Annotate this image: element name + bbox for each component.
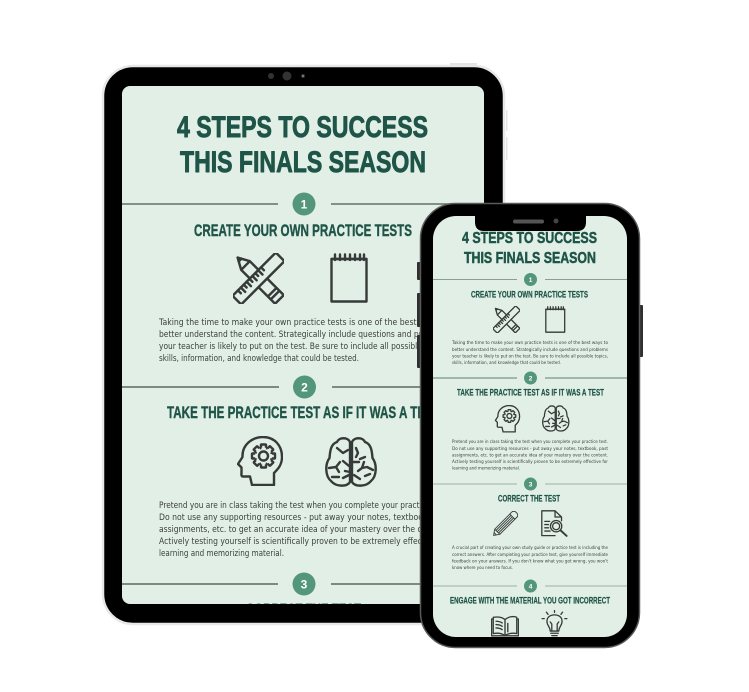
- step 4 heading: ENGAGE WITH THE MATERIAL YOU GOT INCORRECT: [450, 596, 610, 606]
- step 1 heading: CREATE YOUR OWN PRACTICE TESTS: [471, 290, 588, 300]
- step 3 text: correct answers. After completing your practice test, give yourself immediate: [452, 552, 608, 558]
- step 2 text: Do not use any supporting resources - put away your notes, textbook, past: [452, 446, 608, 452]
- step 3 text: know where you need to focus.: [452, 565, 513, 571]
- step 1 text: better understand the content. Strategically include questions and problems: [159, 330, 449, 340]
- step 3 heading: CORRECT THE TEST: [246, 601, 361, 619]
- step 1 text: better understand the content. Strategically include questions and problems: [452, 347, 609, 353]
- step 4 divider: [433, 580, 627, 592]
- step 2 text: Actively testing yourself is scientifically proven to be extremely effective for: [159, 537, 449, 547]
- step 2 text: [159, 501, 420, 558]
- step 2 text: assignments, etc. to get an accurate idea of your mastery over the content.: [452, 452, 608, 458]
- tablet hardware buttons: [450, 63, 508, 160]
- step 3 text: [452, 545, 608, 571]
- tablet camera: [268, 72, 305, 80]
- step 1 divider: 1: [301, 198, 308, 212]
- step 3 divider: [122, 572, 420, 596]
- step 2 divider: [433, 372, 627, 384]
- step 3 divider: 3: [301, 578, 308, 592]
- step 1 text: skills, information, and knowledge that could be tested.: [452, 360, 561, 366]
- step 2 text: assignments, etc. to get an accurate idea of your mastery over the content.: [159, 525, 449, 535]
- step 2 text: Pretend you are in class taking the test when you complete your practice test.: [159, 501, 449, 511]
- step 2 text: Actively testing yourself is scientifically proven to be extremely effective for: [452, 459, 608, 465]
- step 1 text: [451, 340, 609, 366]
- title: [462, 232, 597, 264]
- icon: pencil: [493, 511, 518, 536]
- icon: pencil and ruler: [233, 253, 284, 304]
- icon: light bulb: [542, 611, 567, 636]
- phone device: [417, 204, 643, 648]
- title: 4 STEPS TO SUCCESS: [462, 230, 597, 247]
- step 2 divider: 2: [301, 380, 308, 394]
- step 1 text: Taking the time to make your own practice tests is one of the best ways to: [158, 318, 449, 328]
- step 3 divider: 3: [529, 482, 533, 488]
- step 1 text: your teacher is likely to put on the test. Be sure to include all possible topics,: [452, 354, 608, 360]
- step 2 text: learning and memorizing material.: [159, 549, 284, 559]
- icon: open book: [492, 617, 518, 636]
- icon: notepad: [546, 307, 565, 332]
- step 2 heading: TAKE THE PRACTICE TEST AS IF IT WAS A TEST: [457, 388, 604, 398]
- step 1 text: your teacher is likely to put on the test. Be sure to include all possible topics,: [159, 342, 449, 352]
- step 2 text: [452, 439, 608, 472]
- step 4 divider: 4: [529, 584, 533, 590]
- step 2 text: Do not use any supporting resources - put away your notes, textbook, past: [159, 513, 450, 523]
- step 2 heading: TAKE THE PRACTICE TEST AS IF IT WAS A TEST: [167, 404, 440, 422]
- step 1 text: [158, 318, 420, 363]
- step 2 text: Pretend you are in class taking the test when you complete your practice test.: [452, 439, 608, 445]
- icon: notepad: [332, 254, 366, 302]
- title: THIS FINALS SEASON: [180, 146, 426, 179]
- phone body: [420, 204, 640, 648]
- step 1 divider: [122, 192, 484, 216]
- step 3 divider: [433, 478, 627, 490]
- step 2 text: learning and memorizing material.: [452, 466, 520, 472]
- phone hardware buttons: [417, 262, 643, 368]
- tablet screen: [122, 86, 484, 619]
- title: THIS FINALS SEASON: [464, 250, 596, 267]
- icon: brain: [543, 406, 569, 431]
- step 1 divider: 1: [529, 277, 533, 284]
- phone screen: [433, 216, 627, 637]
- step 1 text: Taking the time to make your own practice tests is one of the best ways to: [451, 340, 608, 346]
- step 2 divider: [122, 376, 420, 398]
- phone notch: [475, 214, 586, 231]
- step 1 text: skills, information, and knowledge that could be tested.: [159, 354, 359, 364]
- icon: pencil and ruler: [493, 306, 520, 333]
- step 3 text: feedback on your answers. If you don't know what you got wrong, you won't: [452, 558, 608, 564]
- step 1 divider: [433, 273, 627, 286]
- step 2 divider: 2: [529, 376, 533, 382]
- step 3 text: A crucial part of creating your own study guide or practice test is including the: [452, 545, 608, 551]
- step 3 heading: CORRECT THE TEST: [498, 494, 560, 504]
- icon: head with gear: [238, 437, 282, 485]
- icon: document with magnifier: [542, 511, 567, 536]
- title: 4 STEPS TO SUCCESS: [177, 111, 428, 144]
- icon: head with gear: [495, 406, 520, 432]
- tablet device: [103, 63, 508, 624]
- tablet body: [103, 66, 504, 624]
- title: [177, 116, 428, 173]
- step 1 heading: CREATE YOUR OWN PRACTICE TESTS: [194, 222, 412, 240]
- icon: brain: [326, 438, 376, 486]
